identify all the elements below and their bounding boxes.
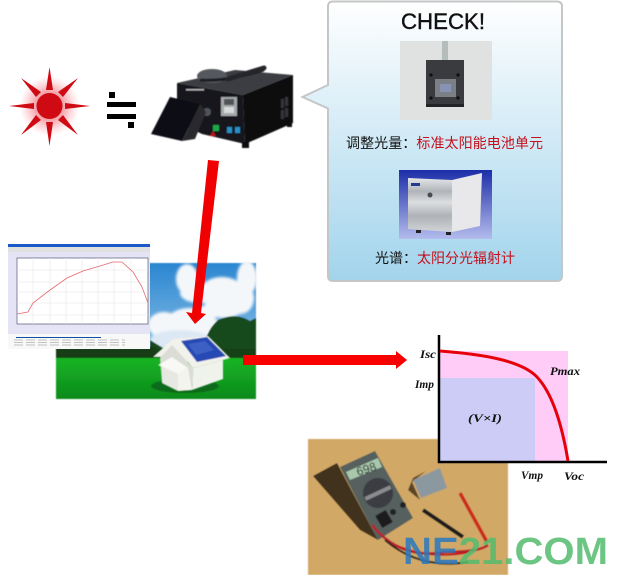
label: V x I: (V×I) bbox=[468, 411, 502, 425]
photo: house with solar panel in landscape bbox=[56, 261, 257, 399]
photo: spectroradiometer bbox=[399, 170, 492, 239]
solar simulator device bbox=[151, 68, 293, 148]
house walls and roof bbox=[153, 336, 230, 368]
watermark: NE21.COM: NE21.COM bbox=[403, 531, 608, 573]
heading: CHECK!: CHECK! bbox=[401, 9, 485, 34]
IV curve chart bbox=[414, 335, 607, 483]
arrow: simulator to house bbox=[186, 160, 219, 324]
screenshot: IV measurement software bbox=[8, 244, 150, 349]
photo: multimeter with small solar cell bbox=[308, 439, 508, 575]
chart plot area bbox=[17, 258, 148, 324]
label: Imp: Imp bbox=[414, 377, 434, 391]
icon: red sun bbox=[9, 67, 90, 146]
callout panel: CHECK bbox=[302, 2, 562, 281]
label: Pmax: Pmax bbox=[550, 364, 580, 378]
caption: spectrum: 光谱：太阳分光辐射计 bbox=[375, 250, 515, 266]
label: Voc: Voc bbox=[564, 469, 585, 483]
photo: standard solar cell bbox=[400, 41, 492, 120]
photo: multimeter with small solar cell: 698 bbox=[355, 459, 378, 479]
label: Vmp: Vmp bbox=[521, 468, 543, 482]
arrow: house to IV chart bbox=[243, 351, 407, 369]
icon: approximately equal sign bbox=[107, 92, 136, 128]
caption: light adjustment: 调整光量：标准太阳能电池单元 bbox=[346, 135, 543, 151]
label: Isc: Isc bbox=[419, 347, 437, 361]
